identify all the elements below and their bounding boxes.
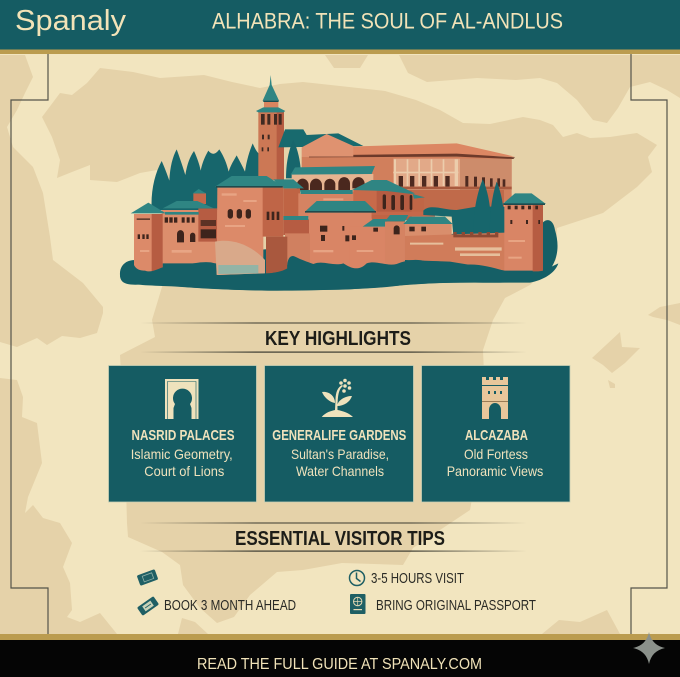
tip: passport: BRING ORIGINAL PASSPORT (376, 597, 536, 614)
palace of Charles V (302, 143, 515, 212)
text: Nasrid Palaces: NASRID PALACES (132, 427, 234, 444)
icon: sparkle (633, 632, 665, 664)
logo: Spanaly (15, 5, 127, 37)
title: ALHABRA: THE SOUL OF AL-ANDLUS (212, 8, 563, 34)
icon: ticket (137, 569, 158, 586)
right trees and hedge (423, 179, 505, 235)
right tower (503, 193, 546, 271)
text: Generalife Gardens (272, 427, 406, 479)
icon: passport (350, 594, 366, 614)
teal roofs behind (278, 129, 363, 178)
header bar (0, 0, 680, 54)
footer call to action: READ THE FULL GUIDE AT SPANALY.COM (197, 656, 482, 673)
key highlights heading: KEY HIGHLIGHTS (265, 328, 411, 350)
panel: Generalife Gardens (264, 366, 414, 502)
icon: fortress tower (482, 377, 508, 419)
text: Nasrid Palaces: Court of Lions (144, 463, 224, 479)
text: Alcazaba: Panoramic Views (447, 463, 543, 479)
text: Nasrid Palaces: Islamic Geometry, (131, 446, 233, 462)
text: Generalife Gardens: GENERALIFE GARDENS (272, 427, 406, 444)
right wall (405, 232, 505, 271)
footer bar (0, 632, 680, 677)
icon: flowering plant (322, 379, 353, 417)
left wing (131, 189, 217, 273)
icon: horseshoe arch (165, 379, 198, 419)
tip: book ahead: BOOK 3 MONTH AHEAD (164, 597, 296, 614)
central buildings (273, 179, 453, 268)
cypress trees left (152, 143, 270, 210)
bell tower (256, 75, 285, 180)
foliage base (120, 220, 558, 291)
icon: clock (350, 570, 364, 586)
foreground shrubs (120, 256, 558, 291)
text: Nasrid Palaces (131, 427, 234, 479)
visitor tips heading: ESSENTIAL VISITOR TIPS (235, 528, 445, 550)
text: Generalife Gardens: Water Channels (296, 463, 384, 479)
panel: Alcazaba (422, 366, 570, 502)
brick texture (140, 193, 525, 259)
castle illustration (120, 75, 558, 291)
text: Alcazaba: Old Fortess (464, 446, 528, 462)
text: Alcazaba: ALCAZABA (465, 427, 528, 444)
text: Alcazaba (447, 427, 543, 479)
panel: Nasrid Palaces (108, 366, 256, 502)
text: Generalife Gardens: Sultan's Paradise, (291, 446, 389, 462)
icon: booking ticket (137, 596, 159, 616)
arcade gallery (291, 166, 375, 192)
main tower (215, 176, 287, 275)
tip: visit duration: 3-5 HOURS VISIT (371, 570, 464, 587)
